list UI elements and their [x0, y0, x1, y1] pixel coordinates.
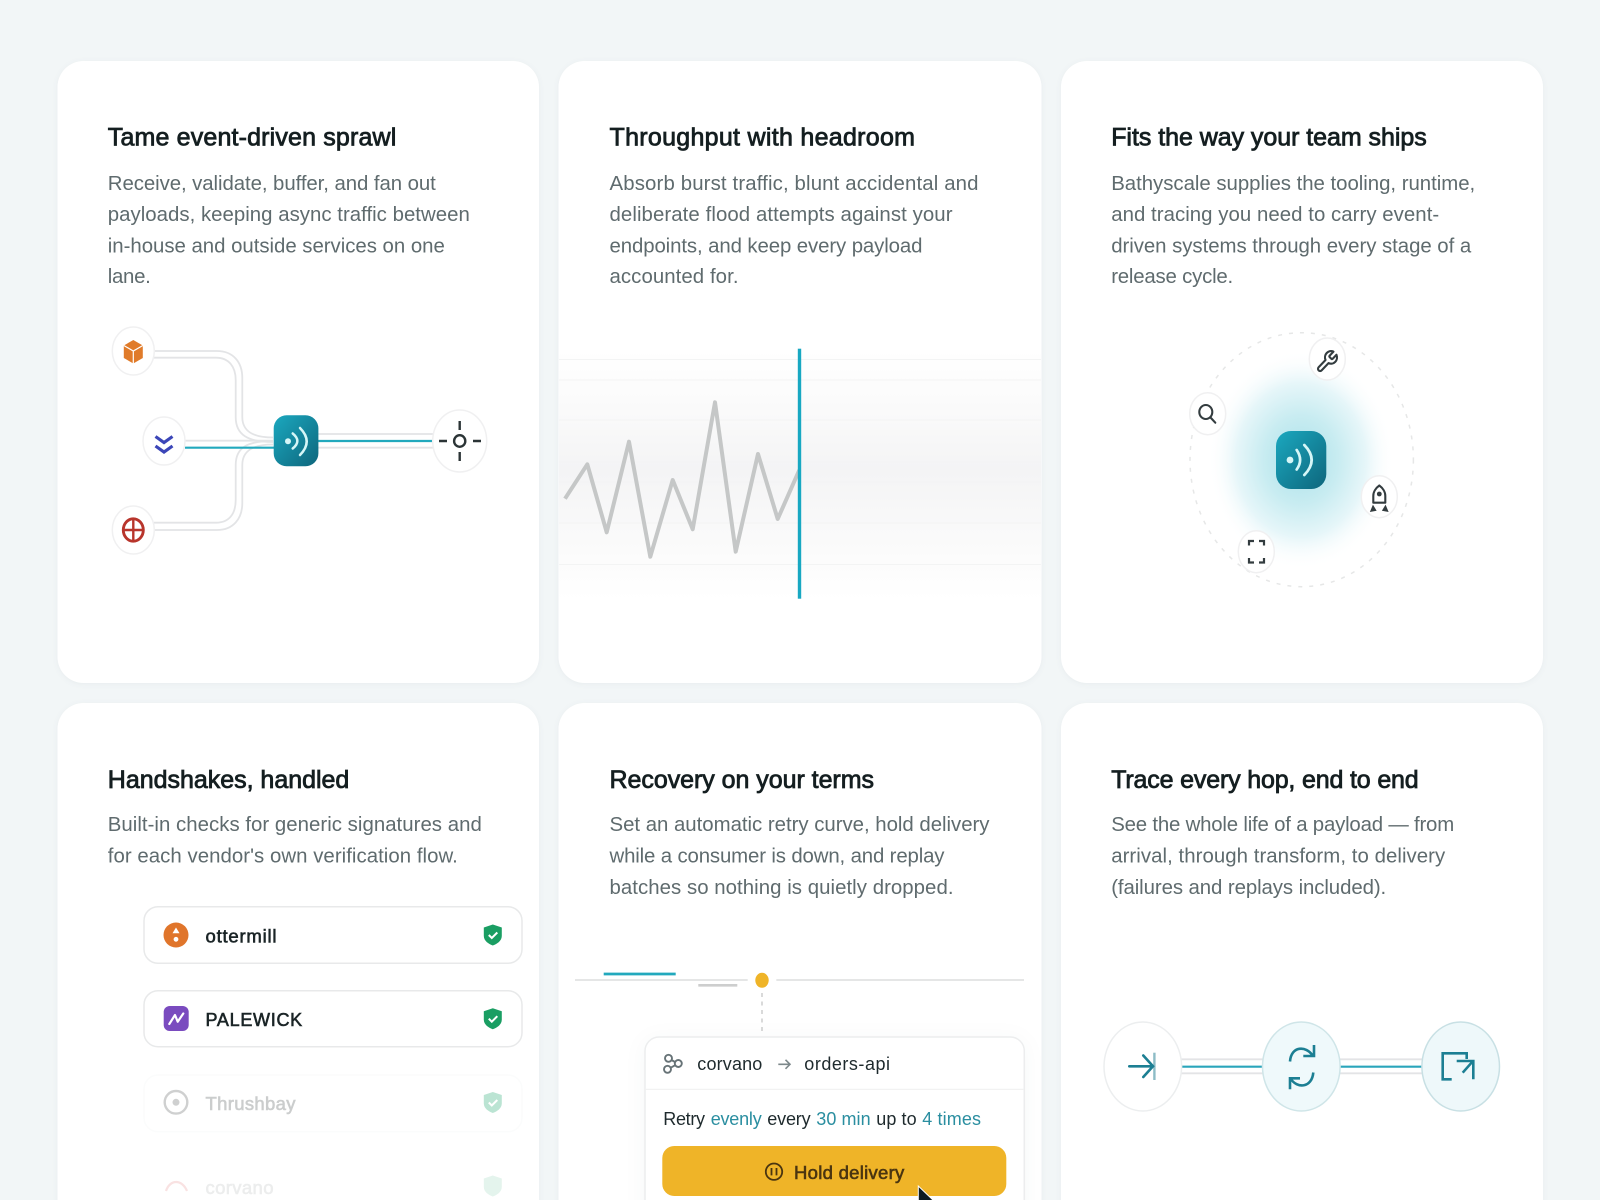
- icon: blue chevrons: [143, 417, 185, 465]
- description: endpoints, and keep every payload: [610, 236, 922, 258]
- flow diagram: [112, 327, 487, 554]
- route label: [697, 1054, 890, 1074]
- description: release cycle.: [1111, 266, 1233, 288]
- description: in-house and outside services on one: [108, 236, 445, 258]
- description: batches so nothing is quietly dropped.: [610, 877, 954, 899]
- description: and tracing you need to carry event-: [1111, 204, 1439, 226]
- orbit diagram: [1190, 333, 1413, 587]
- icon: orange box: [112, 327, 154, 375]
- description: [608, 814, 990, 899]
- retry sentence: every: [767, 1109, 811, 1129]
- heading: Recovery on your terms: [610, 766, 874, 794]
- row: PALEWICK: PALEWICK: [206, 1010, 302, 1030]
- row: ottermill: ottermill: [206, 926, 276, 947]
- panel: Throughput with headroom: [558, 61, 1042, 683]
- icon: red crosshair: [112, 506, 154, 554]
- icon: route: [664, 1055, 682, 1073]
- description: [108, 814, 482, 868]
- icon: receive: [1104, 1022, 1182, 1111]
- description: [610, 173, 978, 288]
- route label: corvano: [697, 1054, 762, 1074]
- retry sentence: [663, 1109, 981, 1129]
- panel: Handshakes, handled: [58, 703, 539, 1200]
- description: Absorb burst traffic, blunt accidental and: [610, 173, 978, 195]
- panel: Fits the way your team ships: [1061, 61, 1543, 683]
- button: hold delivery: Hold delivery: [794, 1162, 905, 1183]
- description: Set an automatic retry curve, hold delivery: [610, 814, 990, 836]
- icon: signal hub: [274, 415, 318, 466]
- description: Bathyscale supplies the tooling, runtime,: [1111, 173, 1475, 195]
- description: (failures and replays included).: [1111, 877, 1386, 899]
- retry sentence: up to: [876, 1109, 917, 1129]
- rate limit marker: [798, 349, 801, 599]
- icon: deliver: [1422, 1022, 1499, 1111]
- panel: Recovery on your terms: [558, 703, 1042, 1200]
- row: Thrushbay: [144, 1075, 522, 1132]
- retry sentence: Retry: [663, 1109, 705, 1129]
- description: See the whole life of a payload — from: [1111, 814, 1454, 836]
- icon: rocket: [1361, 476, 1397, 518]
- description: payloads, keeping async traffic between: [108, 204, 470, 226]
- description: [108, 173, 470, 288]
- description: deliberate flood attempts against your: [610, 204, 953, 226]
- connector lines: [154, 351, 433, 530]
- row: PALEWICK: [144, 991, 522, 1047]
- row: ottermill: [144, 907, 522, 963]
- heading: Fits the way your team ships: [1111, 124, 1427, 152]
- row: corvano: corvano: [206, 1177, 274, 1198]
- icon: wrench: [1309, 338, 1345, 380]
- description: driven systems through every stage of a: [1111, 236, 1472, 258]
- traffic line: [565, 402, 799, 557]
- panel: Tame event-driven sprawl: [58, 61, 539, 683]
- description: [1111, 814, 1454, 899]
- button: hold delivery: [662, 1146, 1006, 1196]
- route label: orders-api: [804, 1054, 890, 1074]
- icon: transform: [1262, 1022, 1340, 1111]
- heading: Trace every hop, end to end: [1111, 766, 1419, 794]
- retry timeline: [575, 973, 1024, 1031]
- retry sentence: evenly: [711, 1109, 762, 1129]
- description: Built-in checks for generic signatures and: [108, 814, 482, 836]
- icon: cursor: [918, 1186, 934, 1200]
- heading: Throughput with headroom: [610, 124, 915, 152]
- description: arrival, through transform, to delivery: [1111, 846, 1446, 868]
- heading: Handshakes, handled: [108, 766, 349, 794]
- retry sentence: 4 times: [922, 1109, 981, 1129]
- heading: Tame event-driven sprawl: [108, 124, 396, 152]
- description: lane.: [108, 266, 151, 288]
- icon: search: [1190, 393, 1226, 435]
- icon: frame: [1238, 531, 1274, 573]
- retry settings panel: [645, 1037, 1024, 1200]
- description: [1111, 173, 1475, 288]
- description: while a consumer is down, and replay: [608, 846, 945, 868]
- description: accounted for.: [610, 266, 738, 288]
- description: Receive, validate, buffer, and fan out: [108, 173, 436, 195]
- row: Thrushbay: Thrushbay: [206, 1093, 296, 1114]
- icon: signal hub: [1276, 431, 1326, 489]
- traffic chart: [559, 349, 1041, 600]
- retry sentence: 30 min: [816, 1109, 871, 1129]
- panel: Trace every hop, end to end: [1061, 703, 1543, 1200]
- lifecycle diagram: [1104, 1022, 1499, 1111]
- row: corvano: [166, 1176, 502, 1198]
- icon: destination target: [433, 410, 487, 472]
- description: for each vendor's own verification flow.: [108, 846, 458, 868]
